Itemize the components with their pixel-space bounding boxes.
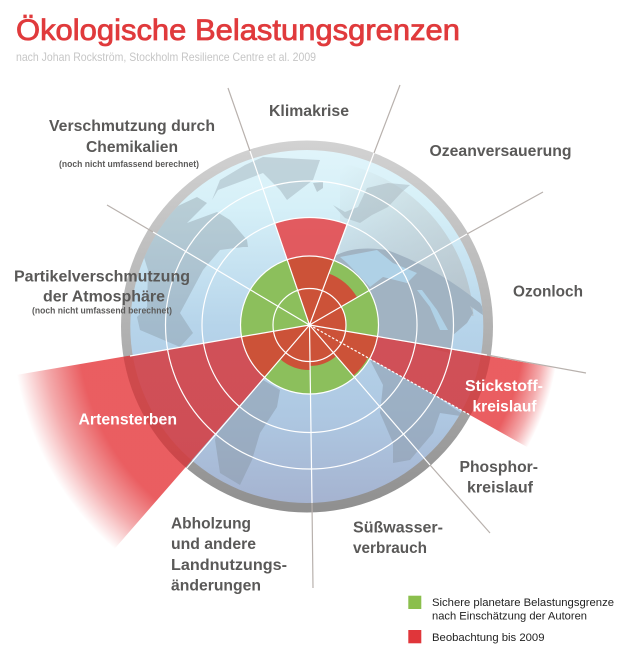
label: Phosphorkreislauf bbox=[460, 459, 538, 496]
label: Verschmutzung durch Chemikalien: Verschmutzung durch bbox=[49, 118, 215, 135]
panel: observed values bbox=[17, 217, 556, 549]
legend: green swatch bbox=[408, 596, 421, 609]
wedge: Phosphorkreislauf bbox=[310, 325, 368, 376]
label: Partikelverschmutzung der Atmosphäre bbox=[14, 268, 190, 316]
label: Phosphorkreislauf: kreislauf bbox=[467, 480, 534, 496]
label: Stickstoffkreislauf bbox=[465, 378, 543, 416]
globe bbox=[121, 140, 493, 512]
label: Abholzung und Landnutzungsänderungen: Abholzung bbox=[171, 516, 251, 532]
label: Verschmutzung durch Chemikalien bbox=[49, 118, 215, 169]
legend: red swatch bbox=[408, 630, 421, 643]
label: Verschmutzung durch Chemikalien: Chemikalien bbox=[86, 139, 178, 156]
globe sea bbox=[130, 150, 483, 503]
subtitle: nach Johan Rockström, Stockholm Resilience Centre et al. 2009 bbox=[16, 50, 316, 64]
wedge: Ozonloch bbox=[310, 307, 346, 331]
legend: safe boundary text: Sichere planetare Belastungsgrenze bbox=[432, 597, 614, 609]
wedge: Artensterben bbox=[17, 325, 309, 549]
label: Ozeanversauerung: Ozeanversauerung bbox=[430, 143, 572, 160]
legend: observation text: Beobachtung bis 2009 bbox=[432, 632, 544, 644]
legend: safe boundary text: nach Einschätzung der Autoren bbox=[432, 610, 587, 622]
panel: safe boundary green disc bbox=[240, 256, 378, 394]
label: Partikelverschmutzung der Atmosphäre: Partikelverschmutzung bbox=[14, 268, 190, 286]
title: Ökologische Belastungsgrenzen bbox=[16, 14, 460, 47]
label: Abholzung und Landnutzungsänderungen: Landnutzungs- bbox=[171, 557, 287, 574]
wedge: Klimakrise bbox=[275, 217, 346, 325]
label: Süßwasserverbrauch: verbrauch bbox=[353, 540, 427, 557]
continents bbox=[137, 157, 490, 494]
label: Abholzung und Landnutzungsänderungen: änderungen bbox=[171, 578, 261, 594]
label: Stickstoffkreislauf: kreislauf bbox=[472, 398, 537, 416]
legend: safe boundary text bbox=[432, 597, 614, 622]
wedge: Landnutzung bbox=[280, 325, 310, 370]
label: Artensterben: Artensterben bbox=[78, 412, 177, 428]
label: Abholzung und Landnutzungsänderungen bbox=[171, 516, 287, 594]
label: Abholzung und Landnutzungsänderungen: und andere bbox=[171, 536, 256, 553]
globe rim bbox=[121, 140, 493, 512]
legend bbox=[408, 596, 614, 644]
label: Phosphorkreislauf: Phosphor- bbox=[460, 459, 538, 476]
wedge: Süßwasserverbrauch bbox=[310, 325, 336, 366]
label: Klimakrise: Klimakrise bbox=[269, 103, 349, 120]
label: Partikelverschmutzung der Atmosphäre: (noch nicht umfassend berechnet) bbox=[32, 306, 172, 316]
wedge: Ozeanversauerung bbox=[310, 273, 357, 325]
wedge: Stickstoffkreislauf bbox=[310, 325, 556, 447]
label: Süßwasserverbrauch: Süßwasser- bbox=[353, 520, 443, 536]
label: Süßwasserverbrauch bbox=[353, 520, 443, 557]
label: Ozonloch: Ozonloch bbox=[513, 284, 583, 300]
label: Verschmutzung durch Chemikalien: (noch nicht umfassend berechnet) bbox=[59, 159, 199, 169]
chart grid rings bbox=[166, 181, 454, 469]
chart spokes bbox=[107, 85, 586, 588]
label: Partikelverschmutzung der Atmosphäre: der Atmosphäre bbox=[43, 288, 165, 306]
label: Stickstoffkreislauf: Stickstoff- bbox=[465, 378, 543, 395]
